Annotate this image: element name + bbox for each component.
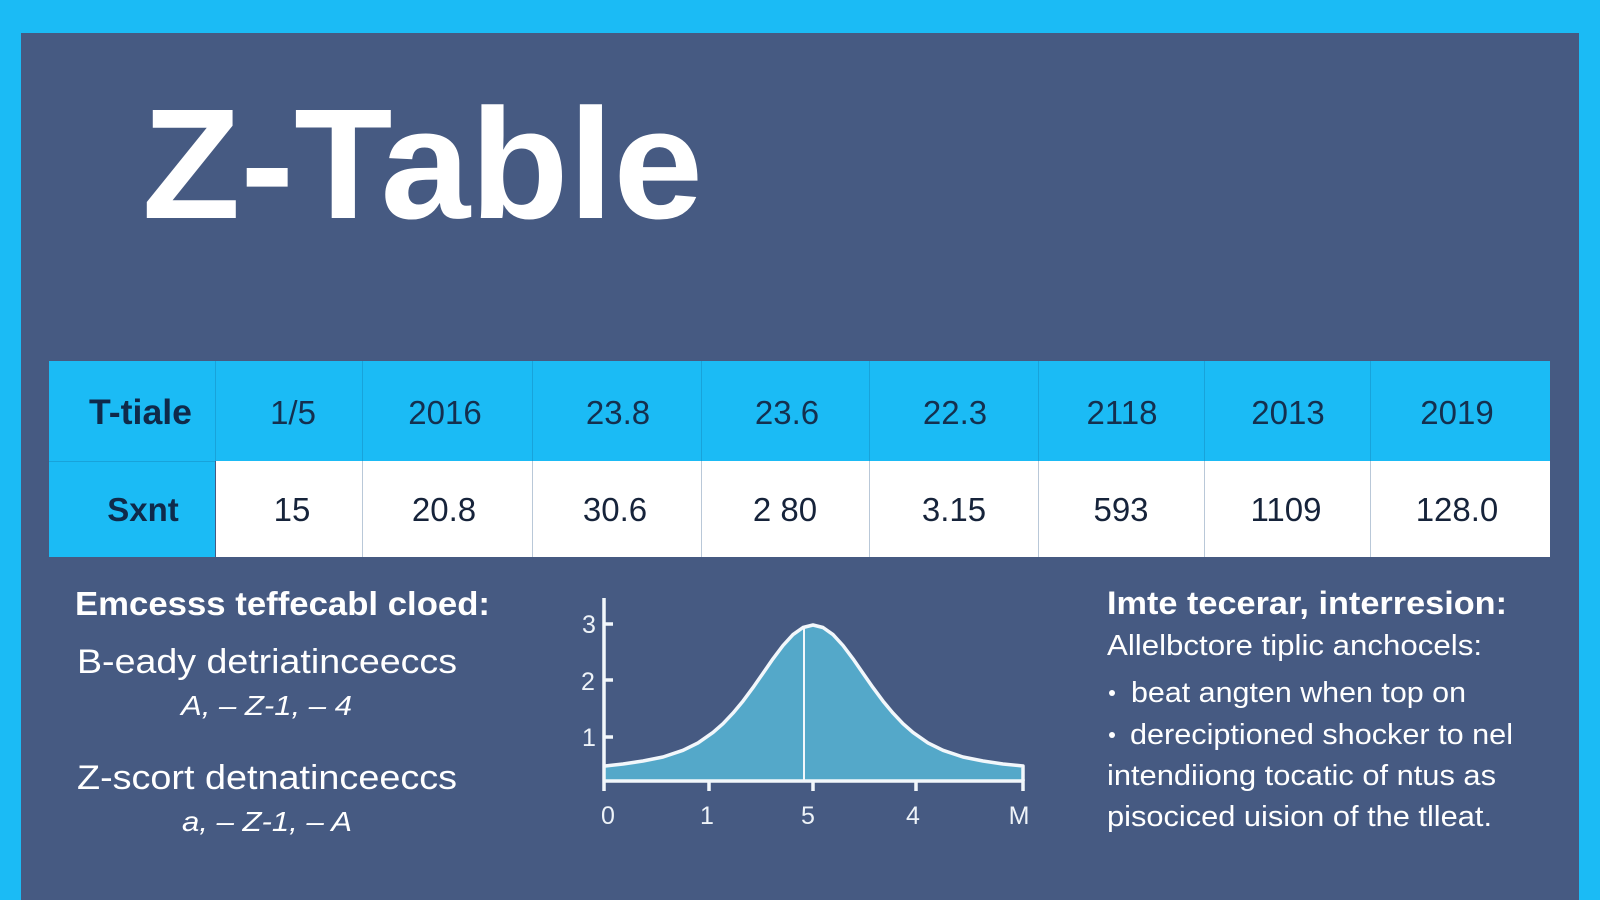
table data row: 2 80: [753, 491, 817, 528]
left heading: Emcesss teffecabl cloed:: [75, 585, 490, 622]
table header row: 2019: [1420, 394, 1494, 431]
table data row: 15: [274, 491, 310, 528]
second formula: a, – Z-1, – A: [182, 806, 352, 837]
right text block: [1107, 585, 1513, 833]
right heading: Imte tecerar, interresion:: [1107, 585, 1507, 621]
intro line: Allelbctore tiplic anchocels:: [1107, 630, 1482, 662]
y axis labels: 2: [581, 668, 595, 696]
y axis labels: 3: [582, 611, 596, 639]
x axis labels: 0: [601, 802, 615, 830]
table header row: [49, 361, 1550, 461]
table data row: 128.0: [1416, 491, 1498, 528]
x axis labels: 1: [700, 802, 714, 830]
closing text: [1107, 760, 1496, 833]
table header row: T-tiale: [89, 393, 192, 432]
x axis labels: 4: [906, 802, 920, 830]
table header row: 2118: [1087, 394, 1157, 431]
table header row: 22.3: [923, 394, 987, 431]
bullet one: beat angten when top on: [1131, 677, 1466, 709]
x axis labels: [601, 802, 1029, 830]
x axis labels: 5: [801, 802, 815, 830]
x axis labels: M: [1009, 802, 1029, 830]
bullet two: dereciptioned shocker to nel: [1130, 719, 1513, 751]
table data row: 1109: [1251, 491, 1321, 528]
table data row: 30.6: [583, 491, 647, 528]
table header row: 2016: [408, 394, 482, 431]
table data row: 20.8: [412, 491, 476, 528]
table header row: 1/5: [270, 394, 316, 431]
bell curve chart: [581, 598, 1029, 830]
curve outline: [605, 625, 1023, 781]
table header row: 23.8: [586, 394, 650, 431]
axes: [604, 598, 1023, 791]
title: Z-Table: [142, 77, 703, 252]
table data row: Sxnt: [107, 491, 179, 528]
first definition: B-eady detriatinceeccs: [77, 643, 457, 681]
left text block: [75, 585, 490, 837]
curve area: [605, 625, 1023, 781]
table data row: [49, 461, 1550, 557]
closing text: pisociced uision of the tlleat.: [1107, 801, 1492, 833]
y axis labels: [581, 611, 596, 752]
first formula: A, – Z-1, – 4: [179, 690, 352, 721]
second definition: Z-scort detnatinceeccs: [77, 759, 457, 797]
table data row: 593: [1093, 491, 1149, 528]
data table: [49, 361, 1550, 557]
table header row: 23.6: [755, 394, 819, 431]
y axis labels: 1: [582, 724, 596, 752]
mean line: [803, 627, 805, 781]
table header row: 2013: [1251, 394, 1325, 431]
table data row: 3.15: [922, 491, 986, 528]
closing text: intendiiong tocatic of ntus as: [1107, 760, 1496, 792]
